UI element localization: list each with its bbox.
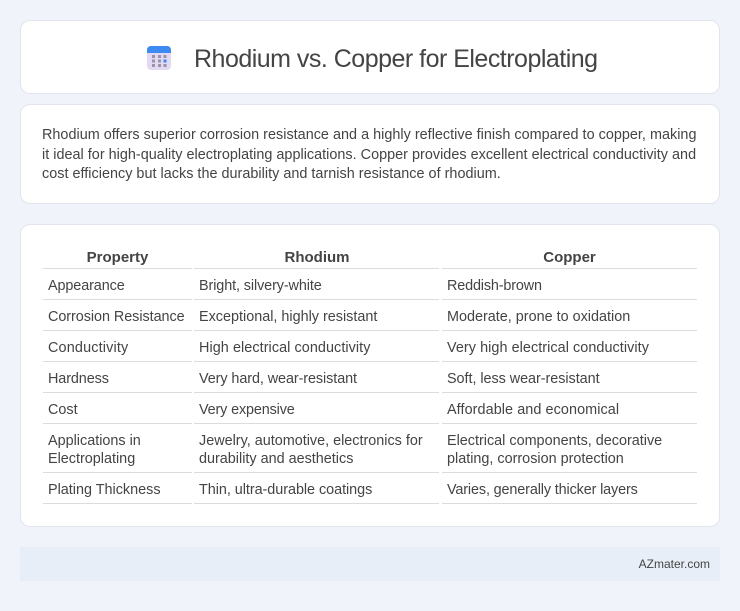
summary text [42,127,696,182]
row: conductivity [43,340,697,362]
table header: Property [87,249,148,266]
table header: Copper [543,249,596,266]
row: appearance: Bright, silvery-white [199,278,322,294]
row: appearance: Appearance [48,278,125,294]
summary text: Rhodium offers superior corrosion resistance and a highly reflective finish compared to copper, making [42,127,696,143]
panel: summary [20,104,720,204]
row: conductivity: Conductivity [48,340,128,356]
icon: calendar [147,46,171,70]
row: plating thickness [43,482,697,504]
row: corrosion resistance: Corrosion Resistance [48,309,185,325]
row: applications in electroplating: Electrical components, decorative [447,433,662,449]
footer bar [20,547,720,581]
row: applications in electroplating: Applications in [48,433,141,449]
row: plating thickness: Plating Thickness [48,482,161,498]
row: hardness: Hardness [48,371,109,387]
row: cost: Affordable and economical [447,402,619,418]
row: applications in electroplating [43,433,697,473]
row: applications in electroplating: durability and aesthetics [199,451,353,467]
panel: comparison table [20,224,720,527]
title: Rhodium vs. Copper for Electroplating [194,45,598,73]
row: cost: Cost [48,402,78,418]
row: conductivity: Very high electrical conductivity [447,340,649,356]
row: hardness: Very hard, wear-resistant [199,371,357,387]
row: cost: Very expensive [199,402,295,418]
summary text: cost efficiency but lacks the durability and tarnish resistance of rhodium. [42,166,501,182]
panel: title card [20,20,720,94]
row: appearance [43,278,697,300]
footer credit: AZmater.com [639,557,710,571]
table header: Rhodium [284,249,350,266]
row: hardness: Soft, less wear-resistant [447,371,600,387]
row: corrosion resistance [43,309,697,331]
row: applications in electroplating: Jewelry, automotive, electronics for [199,433,423,449]
row: hardness [43,371,697,393]
table header [43,249,697,269]
row: appearance: Reddish-brown [447,278,542,294]
row: cost [43,402,697,424]
row: plating thickness: Thin, ultra-durable coatings [199,482,372,498]
summary text: it ideal for high-quality electroplating applications. Copper provides excellent electrical conductivity and [42,147,696,163]
row: corrosion resistance: Moderate, prone to oxidation [447,309,630,325]
row: conductivity: High electrical conductivity [199,340,371,356]
row: applications in electroplating: Electroplating [48,451,135,467]
row: corrosion resistance: Exceptional, highly resistant [199,309,377,325]
row: plating thickness: Varies, generally thicker layers [447,482,638,498]
row: applications in electroplating: plating, corrosion protection [447,451,624,467]
